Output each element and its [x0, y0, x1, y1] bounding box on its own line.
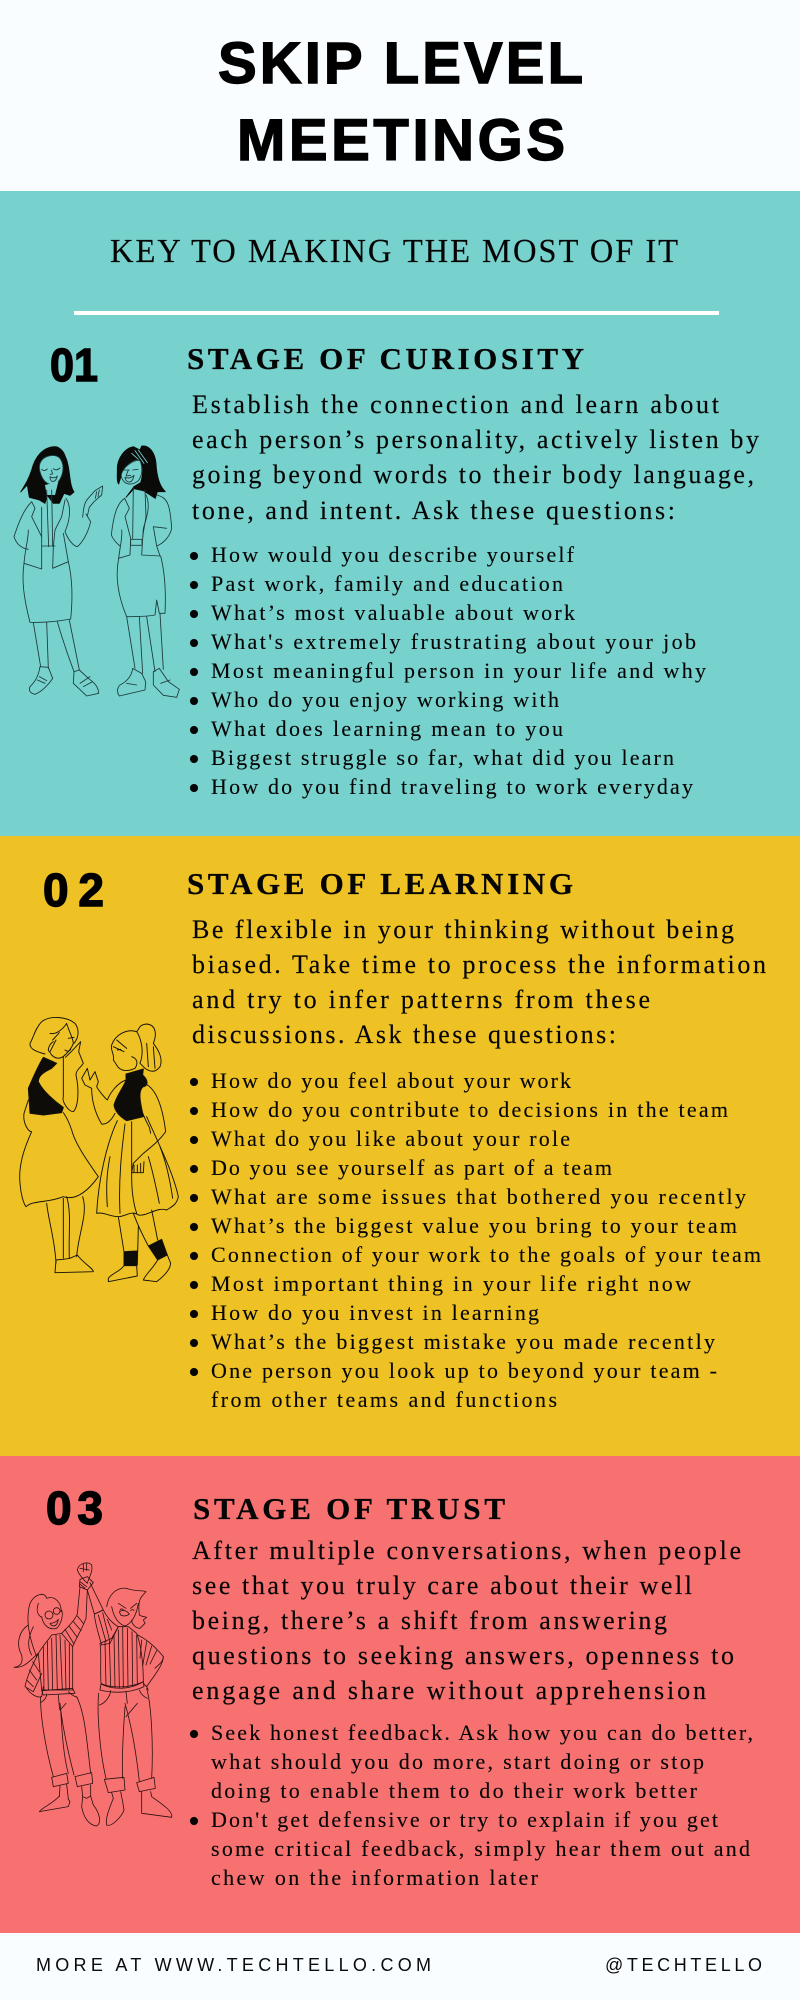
intro text: tone, and intent. Ask these questions: — [192, 496, 675, 525]
header panel — [0, 0, 800, 191]
question list: How would you describe yourself — [211, 542, 575, 567]
advice list: what should you do more, start doing or stop — [211, 1749, 704, 1774]
heading: stage of trust: STAGE OF TRUST — [193, 1491, 505, 1526]
illustration: two women whispering — [20, 1017, 178, 1282]
number 02: 02 — [43, 864, 104, 916]
intro text — [192, 390, 759, 525]
question list: What’s the biggest mistake you made recently — [211, 1329, 715, 1354]
intro text: questions to seeking answers, openness to — [192, 1641, 734, 1670]
question list: from other teams and functions — [211, 1387, 557, 1412]
advice list: Seek honest feedback. Ask how you can do better, — [211, 1720, 753, 1745]
question list: Biggest struggle so far, what did you learn — [211, 745, 674, 770]
intro text — [192, 1536, 741, 1705]
question list: Do you see yourself as part of a team — [211, 1155, 612, 1180]
heading: stage of learning: STAGE OF LEARNING — [187, 866, 573, 901]
panel: stage of trust — [0, 1456, 800, 1933]
question list: What's extremely frustrating about your job — [211, 629, 696, 654]
question list: Connection of your work to the goals of your team — [211, 1242, 761, 1267]
intro text: Establish the connection and learn about — [192, 390, 720, 419]
question list — [190, 1068, 761, 1412]
advice list: chew on the information later — [211, 1865, 539, 1890]
intro text: going beyond words to their body language, — [192, 460, 754, 489]
question list: What’s the biggest value you bring to your team — [211, 1213, 737, 1238]
intro text — [192, 915, 766, 1049]
question list: What does learning mean to you — [211, 716, 563, 741]
intro text: see that you truly care about their well — [192, 1571, 692, 1600]
footer panel — [0, 1933, 800, 2000]
advice list — [190, 1720, 753, 1890]
question list: One person you look up to beyond your team - — [211, 1358, 717, 1383]
question list: Most important thing in your life right now — [211, 1271, 691, 1296]
footer link: MORE AT WWW.TECHTELLO.COM — [36, 1955, 431, 1975]
panel: stage of learning — [0, 836, 800, 1456]
advice list: some critical feedback, simply hear them out and — [211, 1836, 750, 1861]
advice list: Don't get defensive or try to explain if you get — [211, 1807, 718, 1832]
title: SKIP LEVEL — [218, 31, 583, 96]
intro text: engage and share without apprehension — [192, 1676, 706, 1705]
question list: How do you invest in learning — [211, 1300, 539, 1325]
intro text: each person’s personality, actively listen by — [192, 425, 759, 454]
question list: How do you find traveling to work everyday — [211, 774, 693, 799]
question list: What’s most valuable about work — [211, 600, 575, 625]
question list: Most meaningful person in your life and why — [211, 658, 706, 683]
question list: Who do you enjoy working with — [211, 687, 559, 712]
question list: Past work, family and education — [211, 571, 563, 596]
question list: What do you like about your role — [211, 1126, 570, 1151]
question list: What are some issues that bothered you recently — [211, 1184, 746, 1209]
intro text: discussions. Ask these questions: — [192, 1020, 616, 1049]
question list: How do you contribute to decisions in the team — [211, 1097, 728, 1122]
intro text: After multiple conversations, when people — [192, 1536, 741, 1565]
intro text: and try to infer patterns from these — [192, 985, 650, 1014]
question list: How do you feel about your work — [211, 1068, 571, 1093]
intro text: being, there’s a shift from answering — [192, 1606, 667, 1635]
number 01: 01 — [50, 339, 98, 391]
number 03: 03 — [46, 1482, 103, 1534]
intro text: biased. Take time to process the information — [192, 950, 766, 979]
title: MEETINGS — [237, 108, 565, 173]
panel: stage of curiosity — [0, 191, 800, 836]
illustration: two women raising joined hands — [14, 1563, 172, 1826]
illustration: two women talking — [14, 446, 179, 697]
heading: stage of curiosity: STAGE OF CURIOSITY — [187, 341, 584, 376]
subtitle: KEY TO MAKING THE MOST OF IT — [110, 233, 680, 270]
advice list: doing to enable them to do their work better — [211, 1778, 698, 1803]
intro text: Be flexible in your thinking without being — [192, 915, 734, 944]
title — [218, 31, 583, 173]
footer handle: @TECHTELLO — [605, 1955, 762, 1975]
question list — [190, 542, 706, 799]
